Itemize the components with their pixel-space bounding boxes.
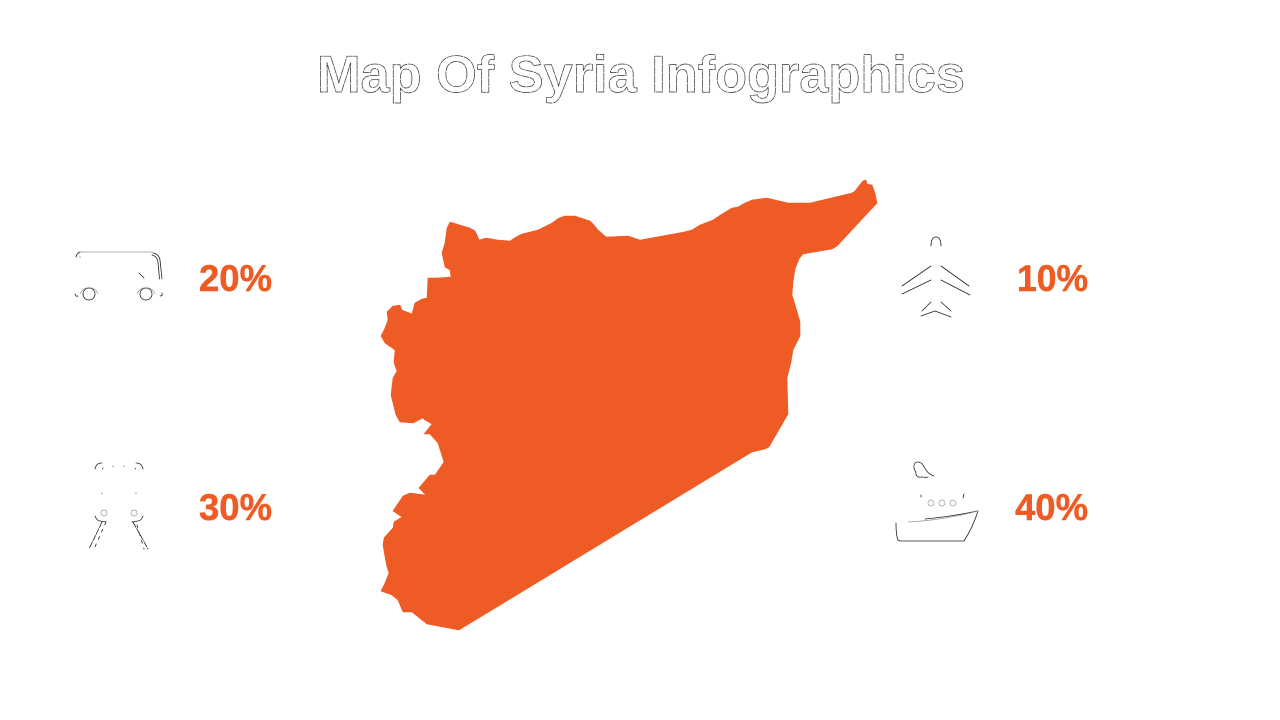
value: 30%: 30% [199, 487, 272, 528]
title: Map Of Syria Infographics [317, 46, 965, 104]
value: 40%: 40% [1015, 487, 1088, 528]
value: 20%: 20% [199, 258, 272, 299]
icon: train [89, 463, 148, 549]
icon: bus [75, 252, 162, 300]
icon: ship [896, 462, 978, 541]
value: 10%: 10% [1017, 258, 1088, 299]
icon: airplane [902, 237, 970, 317]
map of Syria [381, 180, 877, 630]
